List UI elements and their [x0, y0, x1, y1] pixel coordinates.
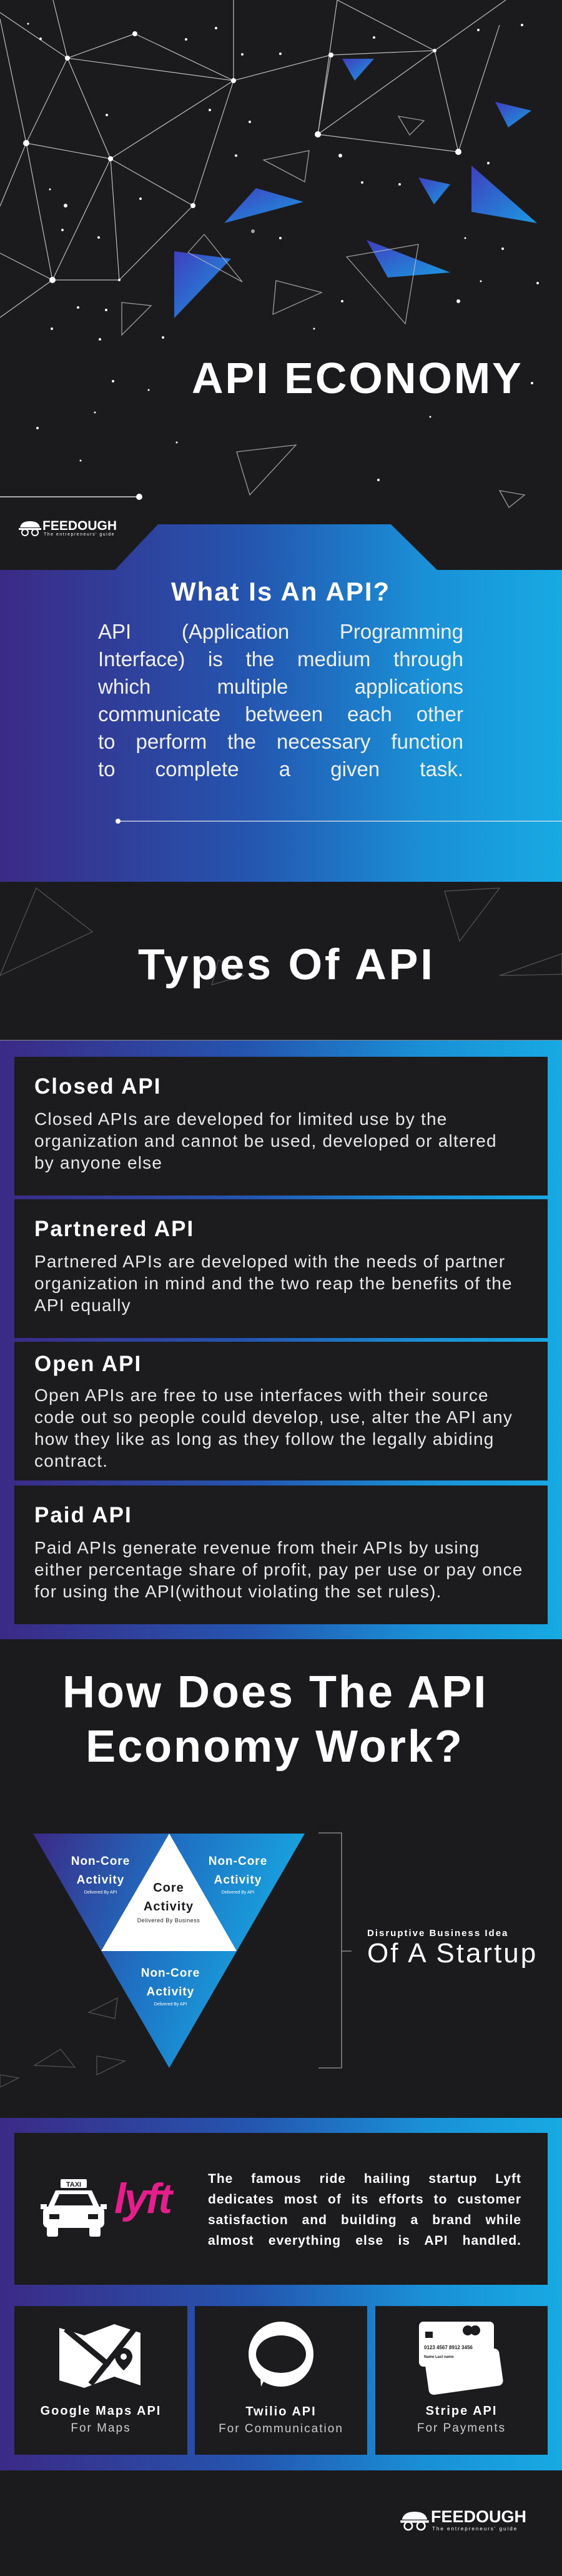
card: closed api: Closed APIs are developed for limited use by the: [34, 1109, 448, 1129]
card: open api: code out so people could develop, use, alter the API any: [34, 1407, 513, 1427]
card: paid api: for using the API(without violating the set rules).: [34, 1582, 442, 1601]
text: non-core left: Non-Core: [71, 1855, 130, 1868]
text: api definition: communicate between each other: [98, 702, 463, 726]
text: disruptive business idea: Disruptive Business Idea: [367, 1928, 508, 1939]
text: lyft description: almost everything else is API handled.: [208, 2234, 521, 2248]
text: api definition: to complete a given task.: [98, 757, 463, 781]
text: non-core bottom: [141, 1967, 200, 2007]
text: lyft description: The famous ride hailing startup Lyft: [208, 2172, 521, 2186]
text: non-core left: [71, 1855, 130, 1895]
card: twilio: [195, 2306, 367, 2455]
card: partnered api: Partnered APIs are developed with the needs of partner: [34, 1252, 505, 1271]
text: api definition: API (Application Programming: [98, 620, 463, 643]
background network starfield: [0, 0, 539, 508]
text: non-core right: Activity: [214, 1874, 262, 1887]
text: core activity: Core: [153, 1881, 184, 1895]
icon: map: [59, 2324, 140, 2388]
card: open api: contract.: [34, 1451, 108, 1470]
logo: feedough footer: [400, 2507, 526, 2532]
panel: what is an api: [0, 524, 562, 882]
logo: feedough top: [19, 519, 117, 537]
icon: credit cards: 0123 4567 8912 3456: [424, 2345, 473, 2350]
text: core activity: Delivered By Business: [137, 1917, 200, 1924]
text: non-core right: Delivered By API: [222, 1890, 254, 1895]
decorative triangles types: [0, 887, 562, 986]
text: lyft description: satisfaction and building a brand while: [208, 2213, 521, 2227]
logo: feedough footer: The entrepreneurs' guide: [432, 2526, 518, 2532]
icon: taxi: TAXI: [66, 2181, 81, 2189]
card: stripe: For Payments: [417, 2422, 506, 2435]
card: open api: [14, 1342, 548, 1480]
card: twilio: Twilio API: [245, 2405, 317, 2419]
card: google maps: Google Maps API: [41, 2404, 161, 2418]
card: partnered api: organization in mind and the two reap the benefits of the: [34, 1274, 513, 1293]
text: non-core left: Delivered By API: [84, 1890, 117, 1895]
card: partnered api: [14, 1199, 548, 1338]
card: google maps: For Maps: [71, 2422, 131, 2435]
text: core activity: [137, 1881, 200, 1924]
text: api definition: to perform the necessary function: [98, 730, 463, 753]
heading: how does the api economy work: [62, 1667, 488, 1772]
card: partnered api: Partnered API: [34, 1217, 194, 1241]
card: lyft: [14, 2133, 548, 2285]
logo: feedough top: The entrepreneurs' guide: [44, 532, 115, 537]
text: non-core right: Non-Core: [209, 1855, 267, 1868]
chart: activity triangle: [0, 1832, 352, 2087]
panel: examples band: [0, 2118, 562, 2470]
text: core activity: Activity: [144, 1900, 194, 1914]
card: open api: Open APIs are free to use interfaces with their source: [34, 1385, 489, 1405]
card: paid api: either percentage share of profit, pay per use or pay once: [34, 1560, 523, 1579]
icon: credit cards: [419, 2322, 503, 2395]
text: api definition: Interface) is the medium through: [98, 647, 463, 671]
logo: feedough top: FEEDOUGH: [42, 519, 117, 533]
card: closed api: [14, 1057, 548, 1196]
text: non-core bottom: Activity: [147, 1985, 194, 1999]
text: non-core bottom: Delivered By API: [154, 2002, 187, 2007]
card: open api: Open API: [34, 1352, 142, 1376]
text: api definition: [98, 620, 463, 781]
text: api definition: which multiple applications: [98, 675, 463, 698]
card: closed api: organization and cannot be used, developed or altered: [34, 1131, 497, 1151]
text: disruptive business idea: Of A Startup: [367, 1938, 538, 1969]
text: lyft description: [208, 2172, 521, 2248]
heading: what is an api: What Is An API?: [171, 577, 390, 606]
logo: feedough footer: FEEDOUGH: [431, 2507, 526, 2526]
text: non-core left: Activity: [77, 1874, 124, 1887]
text: lyft description: dedicates most of its efforts to customer: [208, 2192, 521, 2207]
heading: types of api: Types Of API: [138, 940, 435, 989]
text: non-core bottom: Non-Core: [141, 1967, 200, 1980]
card: partnered api: API equally: [34, 1295, 131, 1315]
card: paid api: Paid API: [34, 1503, 132, 1527]
card: paid api: Paid APIs generate revenue from their APIs by using: [34, 1538, 480, 1557]
heading: how does the api economy work: Economy Work?: [86, 1722, 464, 1772]
card: stripe: Stripe API: [426, 2404, 497, 2418]
card: open api: how they like as long as they follow the legally abiding: [34, 1429, 495, 1449]
icon: credit cards: Name Last name: [424, 2355, 454, 2359]
heading: how does the api economy work: How Does The API: [62, 1667, 488, 1717]
icon: taxi: [41, 2179, 107, 2237]
text: non-core right: [209, 1855, 267, 1895]
card: google maps: [14, 2306, 187, 2455]
card: closed api: Closed API: [34, 1074, 161, 1099]
icon: lyft logo: lyft: [114, 2175, 170, 2222]
title: API ECONOMY: [192, 354, 523, 402]
card: paid api: [14, 1485, 548, 1624]
icon: chat bubble: [249, 2322, 313, 2387]
panel: types band: [0, 1040, 562, 1639]
card: stripe: [375, 2306, 548, 2455]
card: twilio: For Communication: [219, 2422, 343, 2435]
card: closed api: by anyone else: [34, 1153, 162, 1172]
